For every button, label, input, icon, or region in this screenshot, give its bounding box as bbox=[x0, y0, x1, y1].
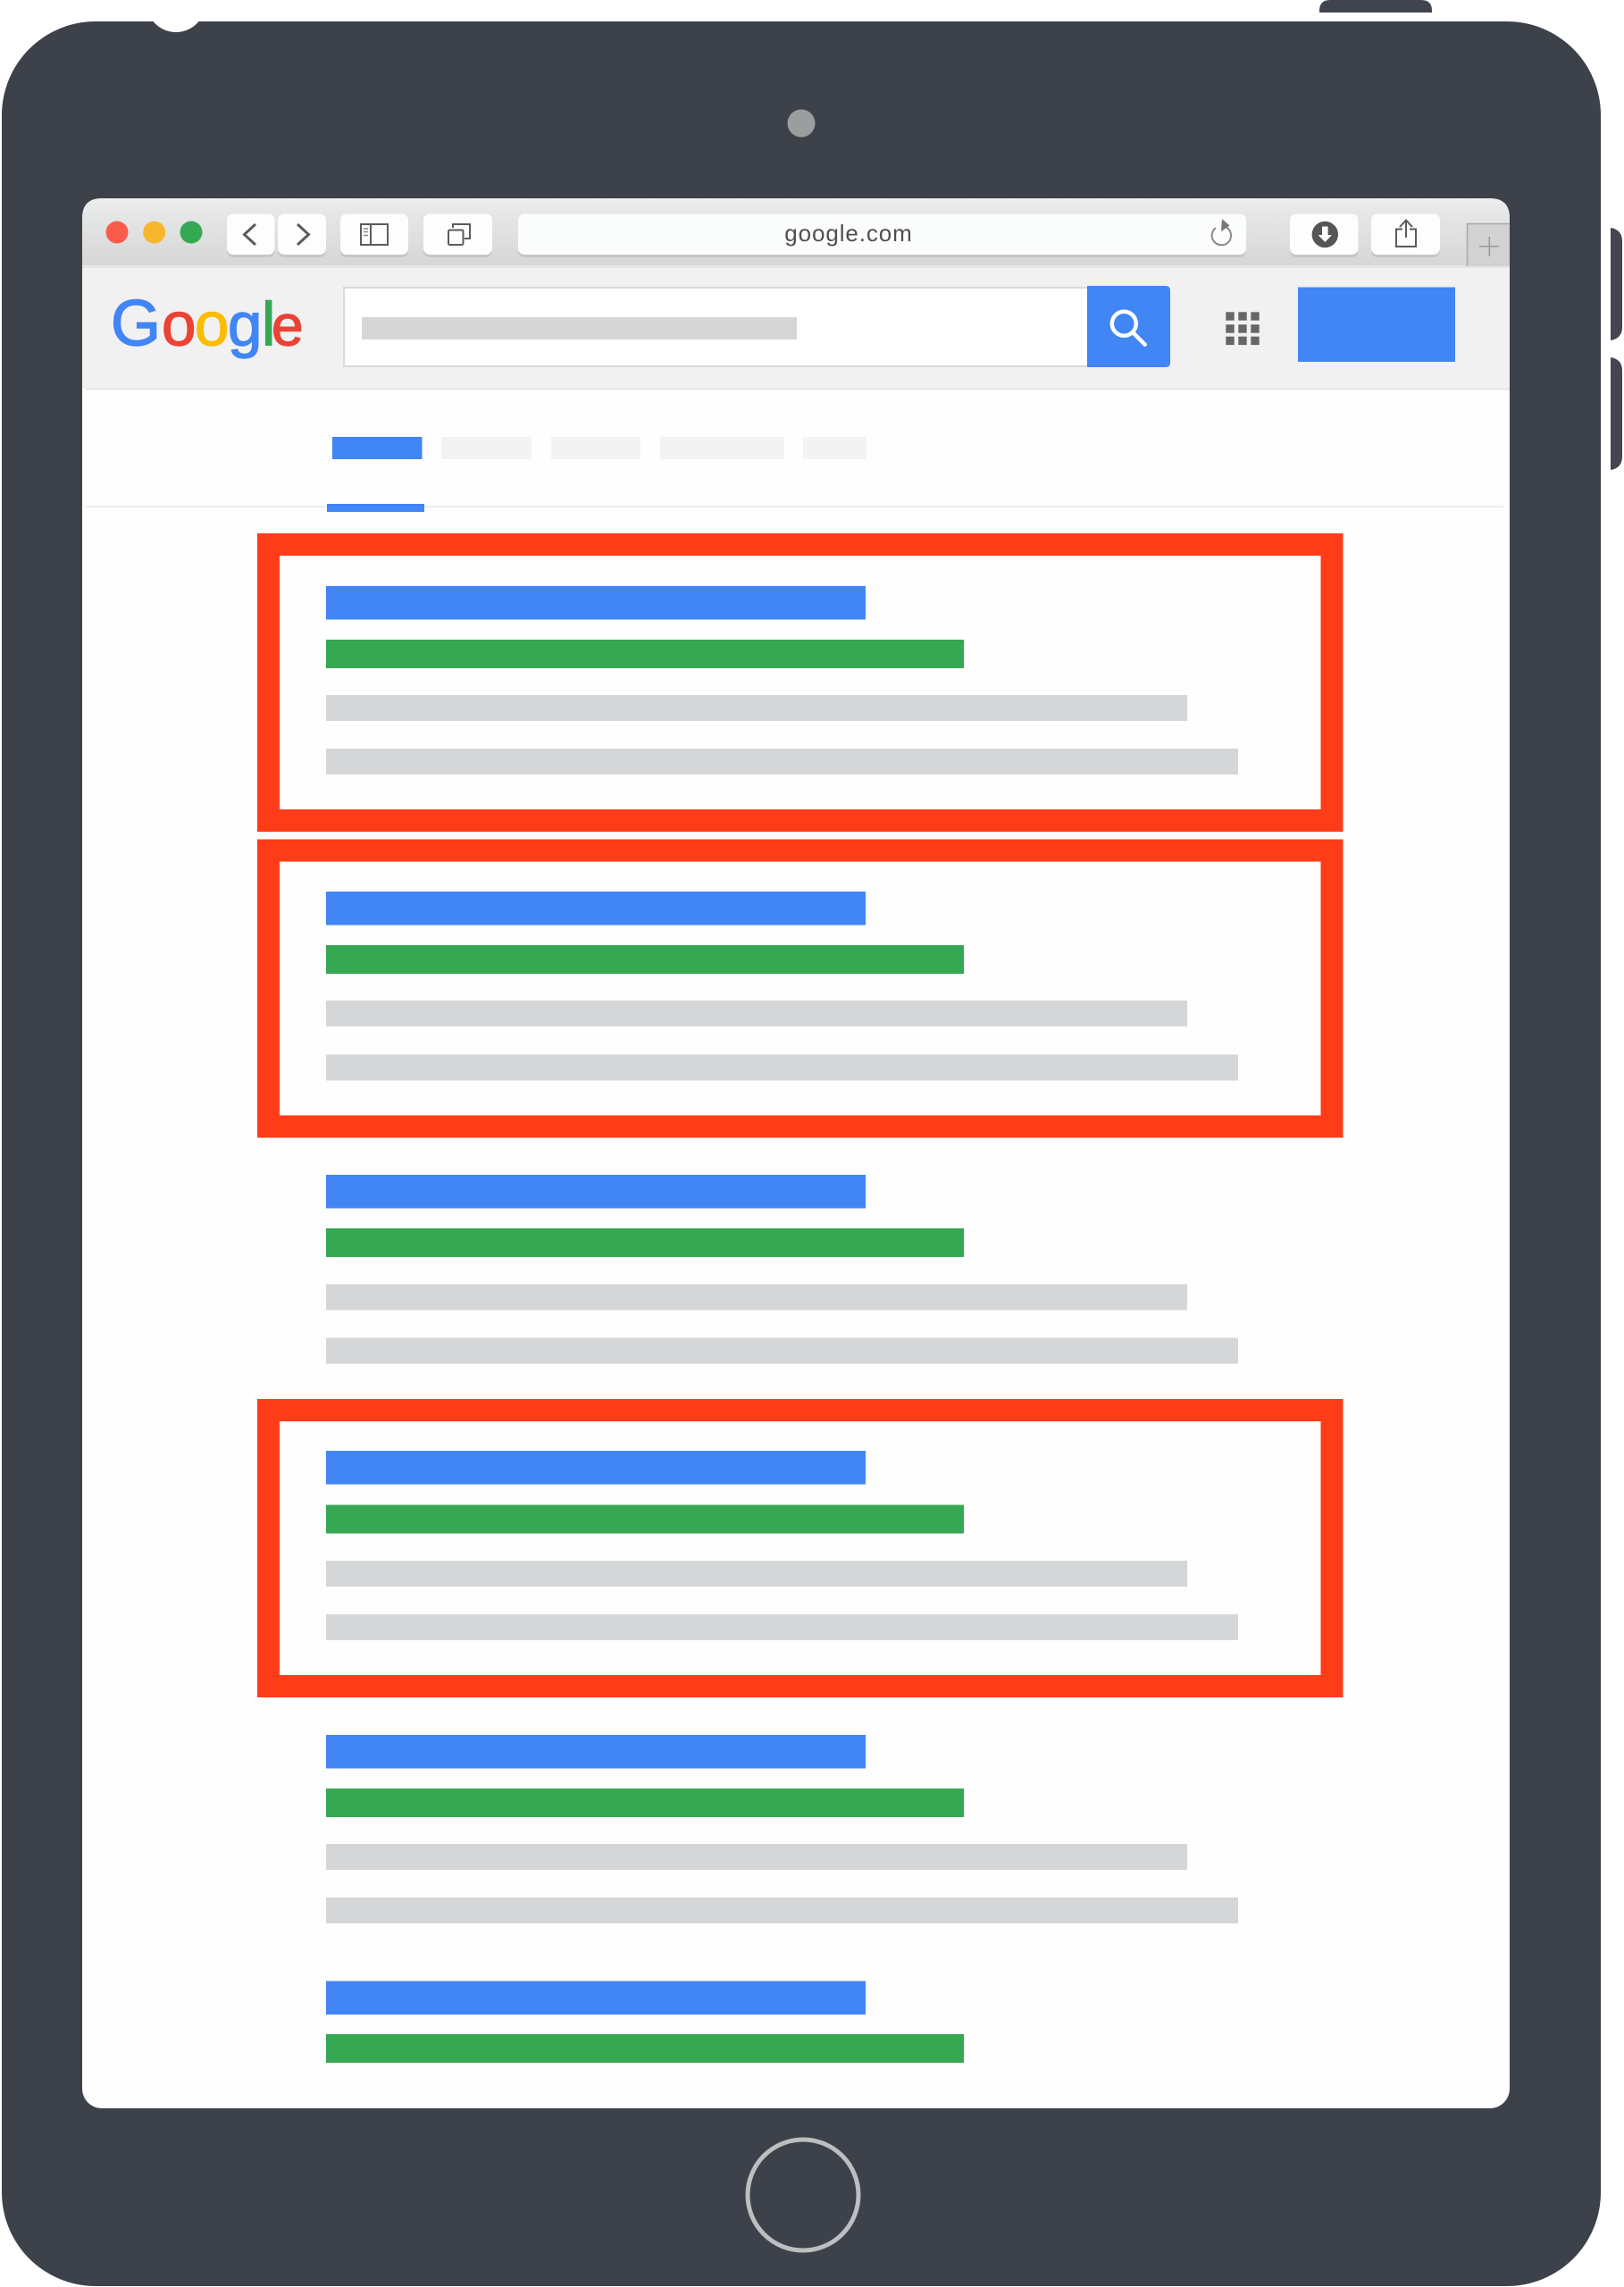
search result 1 bbox=[326, 586, 1238, 775]
search result 5 bbox=[326, 1735, 1238, 1923]
download button bbox=[1290, 214, 1358, 257]
traffic light red bbox=[105, 222, 129, 243]
google logo: e bbox=[272, 293, 304, 357]
search box bbox=[344, 286, 1170, 367]
header background bbox=[82, 268, 1510, 389]
address text: google.com bbox=[784, 220, 913, 247]
inactive tab 1 bbox=[441, 437, 532, 459]
traffic light yellow bbox=[143, 222, 165, 243]
google header bbox=[82, 268, 1510, 390]
search navigation tabs bbox=[86, 437, 1503, 512]
search query placeholder bbox=[362, 317, 797, 339]
search result 4 bbox=[326, 1451, 1238, 1640]
inactive tab 2 bbox=[551, 437, 640, 459]
back button bbox=[227, 214, 275, 257]
search result 2 bbox=[326, 892, 1238, 1081]
reload icon bbox=[1212, 219, 1231, 245]
search button bbox=[1087, 286, 1170, 367]
tablet top button bbox=[1319, 0, 1432, 13]
active tab underline bbox=[327, 504, 424, 512]
share button bbox=[1371, 214, 1440, 257]
address bar bbox=[518, 214, 1246, 257]
active tab bbox=[332, 437, 422, 459]
browser window screen bbox=[82, 198, 1510, 2108]
search result 3 bbox=[326, 1175, 1238, 1363]
apps grid icon bbox=[1226, 312, 1260, 345]
tablet top notch bbox=[146, 0, 205, 32]
google logo: G bbox=[111, 288, 161, 359]
google logo: o bbox=[195, 289, 229, 359]
inactive tab 4 bbox=[803, 437, 866, 459]
google logo: o bbox=[162, 289, 196, 359]
forward button bbox=[278, 214, 326, 257]
inactive tab 3 bbox=[660, 437, 784, 459]
new tab button bbox=[1467, 223, 1510, 266]
tablet side button upper bbox=[1611, 228, 1622, 340]
google logo: g bbox=[228, 289, 262, 359]
screen background bbox=[82, 198, 1510, 2108]
highlight box 3 bbox=[268, 1410, 1332, 1687]
front camera bbox=[788, 109, 815, 138]
toolbar background bbox=[82, 198, 1510, 267]
highlight box 2 bbox=[268, 850, 1332, 1127]
tabs button bbox=[423, 214, 492, 257]
sidebar button bbox=[340, 214, 408, 257]
sign in button bbox=[1298, 288, 1455, 362]
home button bbox=[748, 2140, 858, 2250]
browser toolbar bbox=[82, 198, 1510, 268]
traffic light green bbox=[180, 222, 202, 243]
highlight box 1 bbox=[268, 545, 1332, 820]
google logo: l bbox=[262, 289, 275, 359]
search magnifier icon bbox=[1112, 312, 1145, 345]
tablet side button lower bbox=[1611, 357, 1622, 470]
search result 6 bbox=[326, 1981, 964, 2063]
